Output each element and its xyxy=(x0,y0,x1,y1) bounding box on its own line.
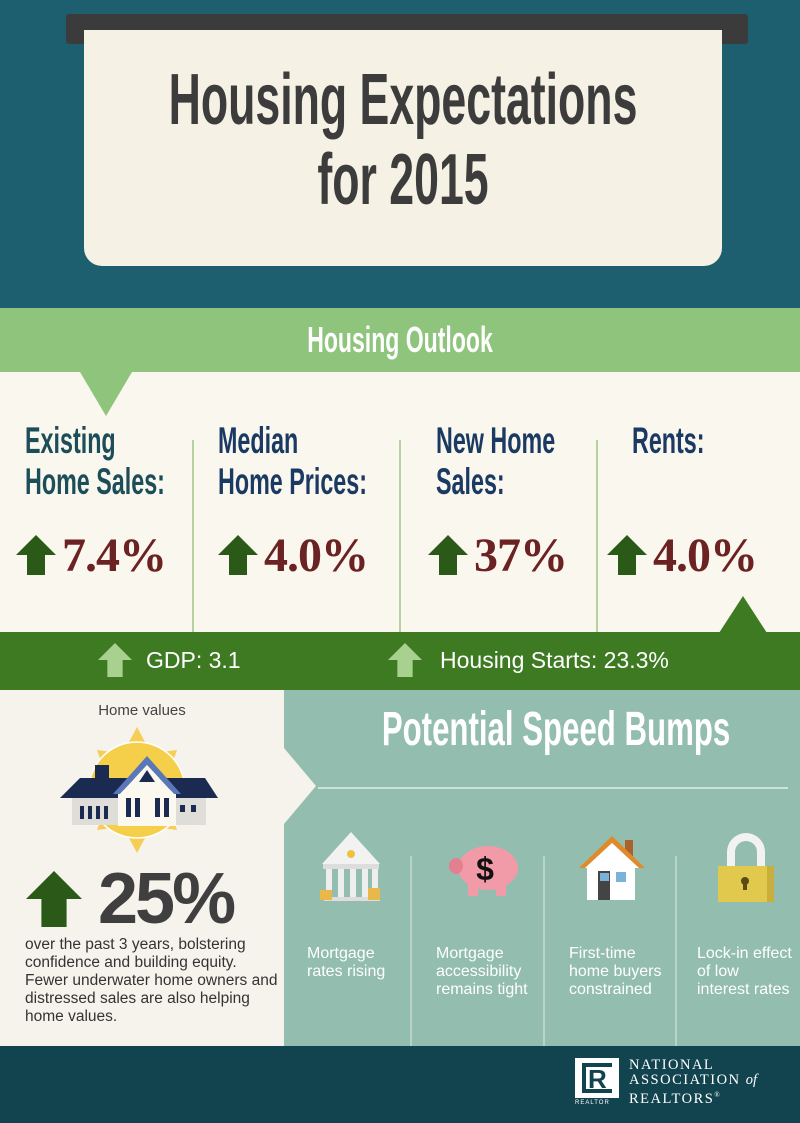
gdp band xyxy=(0,632,800,690)
title xyxy=(169,60,637,220)
outlook panel xyxy=(0,372,800,632)
stat: 25% xyxy=(26,859,234,939)
title bar xyxy=(66,14,748,44)
text: lock-in effect: Lock-in effect xyxy=(697,945,792,962)
text: mortgage rates rising: Mortgage xyxy=(307,945,375,962)
panel: potential speed bumps xyxy=(284,690,800,1046)
text: first-time buyers: First-time xyxy=(569,945,636,962)
housing starts xyxy=(388,643,669,677)
text: first-time buyers: home buyers xyxy=(569,963,662,980)
heading: Potential Speed Bumps xyxy=(382,703,731,756)
pointer triangle xyxy=(80,372,132,416)
icon: house xyxy=(579,836,645,900)
title card xyxy=(84,30,722,266)
text: first-time buyers: constrained xyxy=(569,981,652,998)
text: Home Prices: xyxy=(218,461,367,502)
title: Housing Expectations xyxy=(169,60,637,140)
housing starts: Housing Starts: 23.3% xyxy=(440,646,669,672)
footer xyxy=(0,1046,800,1123)
text: mortgage accessibility: accessibility xyxy=(436,963,521,980)
text: 4.0% xyxy=(264,528,368,582)
text: Median xyxy=(218,420,298,461)
icon: bank xyxy=(320,832,380,901)
logo: NAR: R xyxy=(588,1064,607,1094)
housing outlook band xyxy=(0,308,800,372)
text: mortgage rates rising xyxy=(307,945,385,980)
title: for 2015 xyxy=(317,140,489,220)
icon: padlock xyxy=(718,833,774,902)
logo: NAR: REALTORS® xyxy=(629,1091,721,1107)
stat: rents xyxy=(607,420,757,582)
gdp xyxy=(98,643,241,677)
text: Sales: xyxy=(436,461,505,502)
description: over the past 3 years, bolstering confidence and building equity. Fewer underwater home owners and distressed sales are also helping home values. xyxy=(25,936,277,1025)
stat: 25%: 25% xyxy=(98,859,233,939)
text: mortgage accessibility xyxy=(436,945,528,998)
panel: home values xyxy=(0,690,284,1046)
stat: new home sales xyxy=(428,420,567,582)
up triangle xyxy=(719,596,767,633)
icon: piggy bank xyxy=(449,846,518,896)
text: lock-in effect: of low xyxy=(697,963,739,980)
text: lock-in effect xyxy=(697,945,792,998)
heading: Housing Outlook: Housing Outlook xyxy=(307,319,493,360)
text: mortgage rates rising: rates rising xyxy=(307,963,385,980)
text: 7.4% xyxy=(62,528,166,582)
label: Home values xyxy=(98,702,186,719)
text: Rents: xyxy=(632,420,705,461)
logo: NAR xyxy=(575,1057,759,1107)
notch xyxy=(284,748,316,824)
logo: NAR: REALTOR xyxy=(575,1100,610,1106)
icon: piggy bank: $ xyxy=(476,851,494,887)
gdp: GDP: 3.1 xyxy=(146,646,241,672)
text: lock-in effect: interest rates xyxy=(697,981,789,998)
text: 37% xyxy=(474,528,567,582)
text: Home Sales: xyxy=(25,461,165,502)
text: New Home xyxy=(436,420,555,461)
stat: existing home sales xyxy=(16,420,166,582)
text: 4.0% xyxy=(653,528,757,582)
logo: NAR: ASSOCIATION of xyxy=(629,1072,757,1088)
stat: median home prices xyxy=(218,420,368,582)
icon: house with sun xyxy=(60,727,218,853)
text: first-time buyers xyxy=(569,945,662,998)
text: mortgage accessibility: Mortgage xyxy=(436,945,504,962)
header background xyxy=(0,0,800,308)
text: mortgage accessibility: remains tight xyxy=(436,981,528,998)
text: Existing xyxy=(25,420,116,461)
logo: NAR: NATIONAL xyxy=(629,1057,714,1073)
